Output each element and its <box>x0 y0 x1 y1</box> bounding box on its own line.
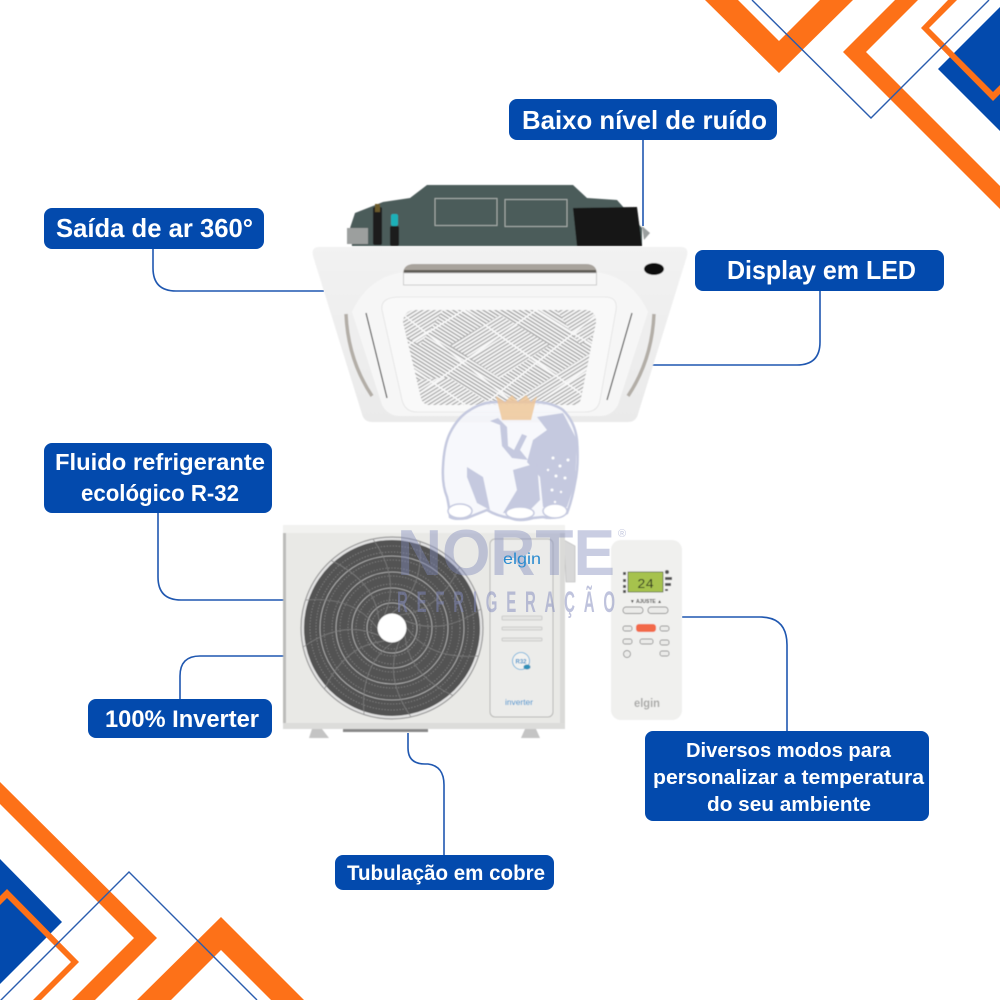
lcd: 24 <box>637 577 654 593</box>
label: Diversos modos para personalizar a temperatura: do seu ambiente <box>707 793 871 816</box>
side bracket <box>564 540 575 582</box>
bear white spots <box>547 456 570 503</box>
connector: Tubulacao em cobre <box>408 733 444 855</box>
connector: 100% Inverter <box>180 656 284 699</box>
panel vents <box>502 616 542 641</box>
connector: Fluido refrigerante <box>158 513 284 600</box>
cassette panel <box>313 247 687 422</box>
label: Display em LED: Display em LED <box>727 255 916 285</box>
label: 100% Inverter: 100% Inverter <box>105 706 259 733</box>
label: Baixo nivel de ruido: Baixo nível de ruído <box>522 105 767 135</box>
connector: Display em LED <box>648 291 820 365</box>
label: Diversos modos para personalizar a temperatura: Diversos modos para <box>686 739 892 762</box>
label: Display em LED <box>695 250 944 291</box>
R32 badge: R32 <box>515 660 527 666</box>
buttons <box>623 607 669 658</box>
watermark: NORTE wordmark: NORTE <box>397 516 615 589</box>
product: remote control <box>611 540 682 720</box>
watermark: registered mark: ® <box>618 528 626 540</box>
inverter logo: inverter <box>505 697 533 707</box>
label: Fluido refrigerante ecologico R-32: Fluido refrigerante <box>55 449 265 475</box>
cassette inner frame <box>352 272 648 416</box>
decoration: top right geometric shapes <box>705 0 1000 209</box>
connector: Diversos modos <box>682 617 787 731</box>
feet <box>309 729 540 738</box>
decoration: bottom left geometric shapes <box>0 782 304 1000</box>
power button <box>636 624 656 632</box>
label: Fluido refrigerante ecologico R-32: ecológico R-32 <box>81 480 239 506</box>
front service panel <box>490 539 553 717</box>
watermark: REFRIGERACAO wordmark: REFRIGERAÇÃO <box>397 584 615 620</box>
label: Tubulacao em cobre <box>335 855 554 890</box>
connector: Saida de ar <box>153 249 324 291</box>
grille frame <box>382 297 616 412</box>
led display window <box>644 263 664 275</box>
outdoor unit elgin logo: elgin <box>503 551 541 568</box>
remote side icons <box>623 570 672 593</box>
cabinet <box>283 525 565 729</box>
bear shading <box>467 413 577 513</box>
label: Saida de ar 360 <box>44 208 264 249</box>
bear paws <box>448 504 567 519</box>
air slots <box>346 264 654 400</box>
label: Saida de ar 360: Saída de ar 360° <box>56 213 253 243</box>
product: ceiling cassette unit <box>313 185 687 422</box>
adjust label: ▼ AJUSTE ▲ <box>630 599 662 605</box>
crown <box>496 395 537 420</box>
R32 badge <box>512 652 530 670</box>
lcd <box>628 572 663 593</box>
product: outdoor condenser unit <box>283 525 575 738</box>
watermark: polar bear logo <box>443 395 578 520</box>
elgin logo: elgin <box>634 696 660 710</box>
label: Diversos modos para personalizar a temperatura: personalizar a temperatura <box>653 766 925 789</box>
label: Fluido refrigerante ecologico R-32 <box>44 443 272 513</box>
fan <box>301 537 483 719</box>
label: Diversos modos para personalizar a temperatura <box>645 731 929 821</box>
connector: Baixo nivel de ruido <box>642 140 644 226</box>
label: 100% Inverter <box>88 699 272 738</box>
grille <box>402 310 596 406</box>
label: Baixo nivel de ruido <box>509 99 777 140</box>
cassette body <box>347 185 650 246</box>
bear silhouette <box>443 402 578 520</box>
label: Tubulacao em cobre: Tubulação em cobre <box>347 861 545 885</box>
